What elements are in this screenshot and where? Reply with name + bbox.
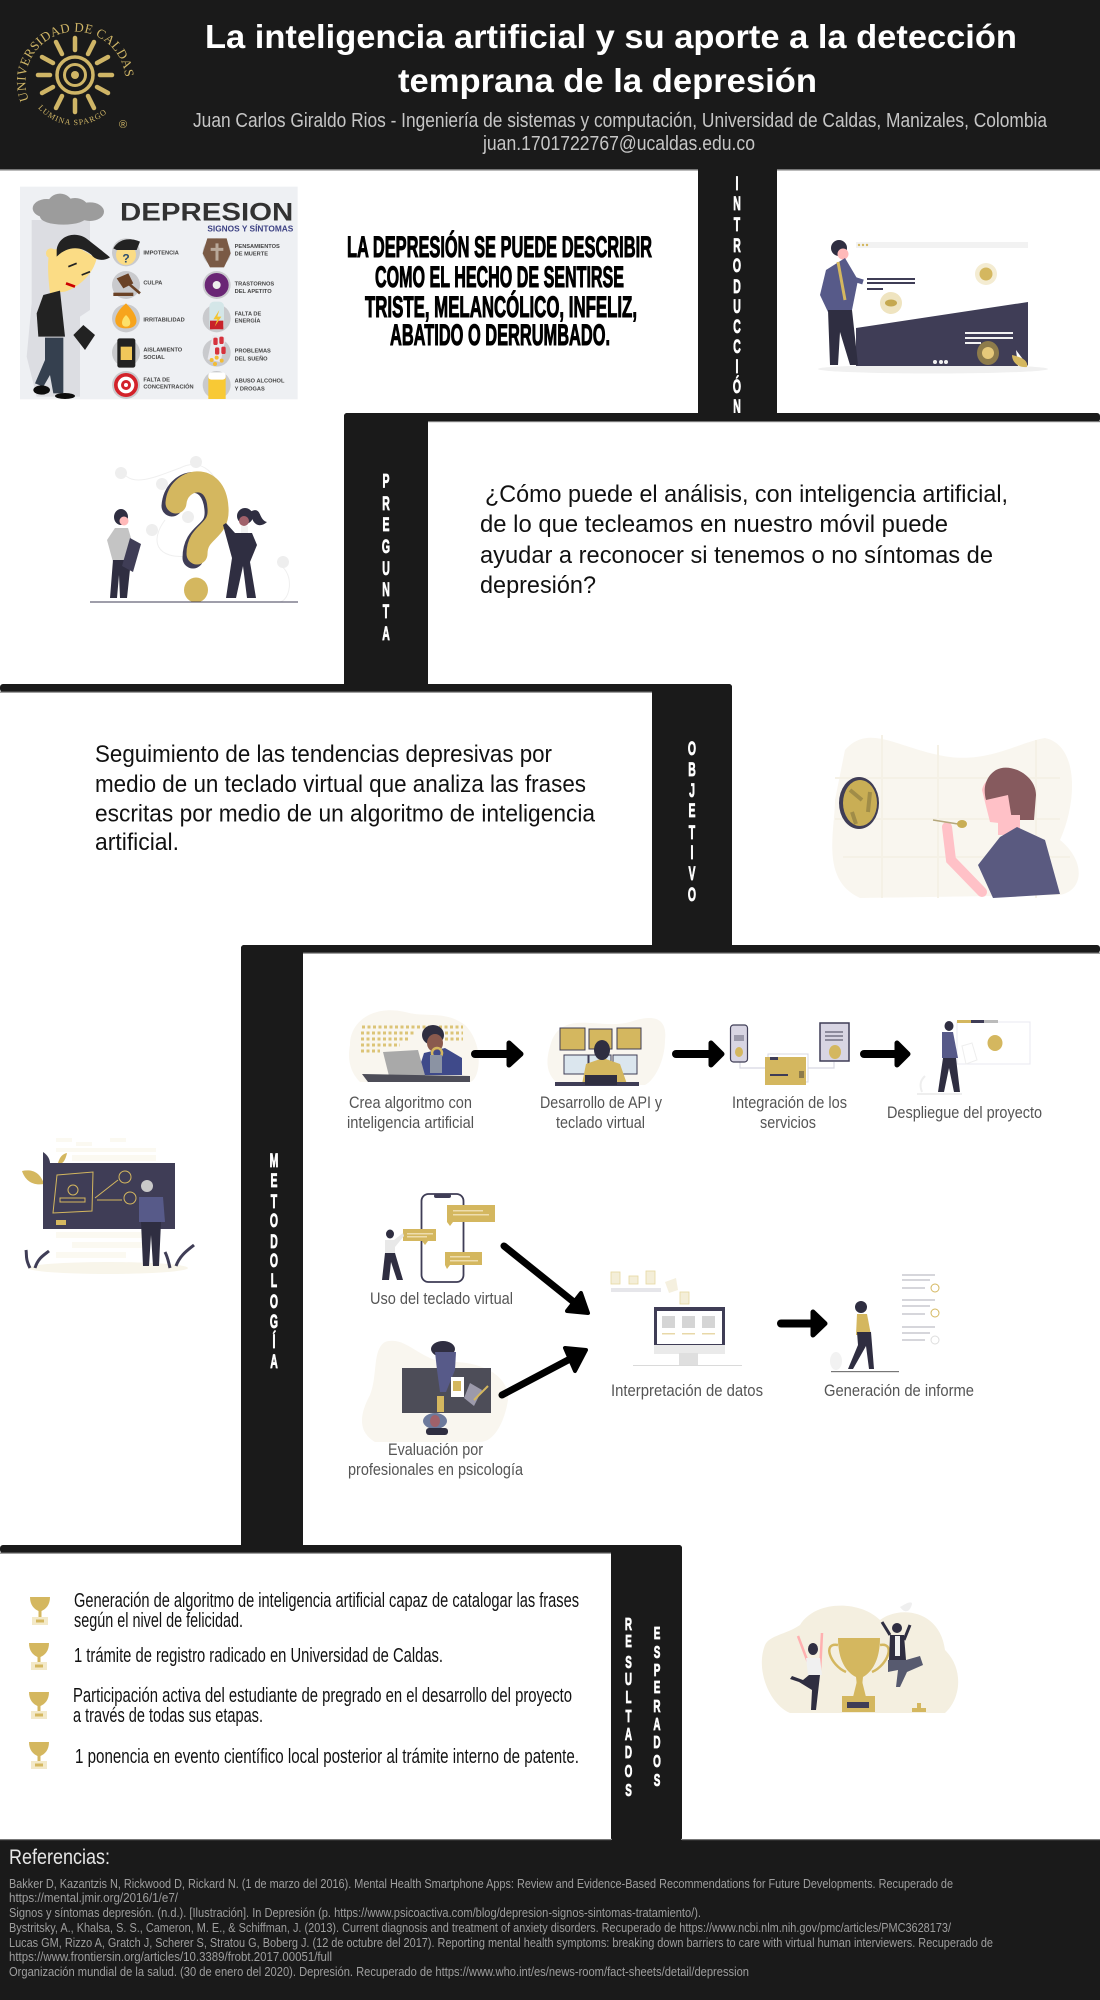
panel: referencias xyxy=(0,1839,1100,2000)
label: uso del teclado virtual: Uso del teclado virtual xyxy=(370,1290,513,1308)
heading: metodologia: Í xyxy=(273,1332,276,1353)
icon: trofeo 2 xyxy=(29,1643,49,1670)
labels: pasos de desarrollo: Desarrollo de API y xyxy=(540,1094,663,1112)
text block: pregunta de investigacion xyxy=(480,481,1008,599)
heading: resultados: U xyxy=(625,1670,632,1690)
heading: metodologia: L xyxy=(271,1271,277,1292)
logo: Universidad de Caldas xyxy=(16,22,134,131)
author and affiliation xyxy=(193,109,1048,155)
image: depresion signos y sintomas: PENSAMIENTOS xyxy=(235,244,280,250)
image: depresion signos y sintomas: DEL APETITO xyxy=(235,289,272,295)
heading: pregunta: P xyxy=(383,471,389,492)
heading: resultados: O xyxy=(625,1762,632,1782)
heading: resultados: D xyxy=(625,1743,632,1763)
illustration: evaluacion por profesionales xyxy=(362,1341,508,1442)
author and affiliation: juan.1701722767@ucaldas.edu.co xyxy=(482,132,755,155)
image: depresion signos y sintomas: FALTA DE xyxy=(143,377,170,383)
heading: resultados: S xyxy=(625,1781,632,1801)
labels: pasos de desarrollo: Crea algoritmo con xyxy=(349,1094,472,1112)
illustration: profesor en pizarra xyxy=(22,1138,194,1274)
icon: trofeo 4 xyxy=(29,1742,49,1769)
image: depresion signos y sintomas: IMPOTENCIA xyxy=(143,250,179,256)
text block: resultados: Generación de algoritmo de inteligencia artificial capaz de catalogar las frases xyxy=(74,1590,579,1612)
heading: introduccion: O xyxy=(733,256,741,277)
heading: introduccion: R xyxy=(733,236,741,257)
text block: resultados: Participación activa del estudiante de pregrado en el desarrollo del proyecto xyxy=(73,1685,572,1707)
list: referencias: Organización mundial de la salud. (30 de enero del 2020). Depresión. Recuperado de https://www.who.int/es/news-room/fact-sheets/detail/depression xyxy=(9,1964,749,1979)
text block: pregunta de investigacion: ¿Cómo puede el análisis, con inteligencia artificial, xyxy=(485,481,1008,508)
panel: introduccion column xyxy=(698,165,777,418)
heading: esperados: E xyxy=(654,1624,661,1644)
arrow: interpretacion a informe xyxy=(781,1312,825,1335)
text block: resultados xyxy=(73,1590,579,1768)
heading: pregunta: R xyxy=(382,494,390,515)
list: referencias: https://mental.jmir.org/2016/1/e7/ xyxy=(9,1890,178,1905)
heading: introduccion: C xyxy=(733,337,741,358)
band: resultados esperados xyxy=(0,1545,682,1841)
heading: metodologia: G xyxy=(270,1312,278,1333)
heading: esperados: R xyxy=(653,1697,661,1717)
heading: esperados: S xyxy=(654,1643,661,1663)
image: depresion signos y sintomas: SOCIAL xyxy=(143,355,165,361)
image: depresion signos y sintomas: ? xyxy=(122,252,130,266)
list: referencias xyxy=(9,1876,993,1979)
text block: resultados: según el nivel de felicidad. xyxy=(74,1610,243,1632)
list: referencias: Signos y síntomas depresión. (n.d.). [Ilustración]. In Depresión (p. https://www.psicoactiva.com/blog/depresion-signos-sintomas-tratamiento/). xyxy=(9,1905,701,1920)
heading: resultados: S xyxy=(625,1653,632,1673)
image: depresion signos y sintomas: IRRITABILIDAD xyxy=(143,318,185,324)
list: referencias: https://www.frontiersin.org/articles/10.3389/frobt.2017.00051/full xyxy=(9,1949,332,1964)
image: depresion signos y sintomas: CULPA xyxy=(143,280,162,286)
heading: metodologia: T xyxy=(271,1192,278,1213)
labels: pasos de desarrollo: servicios xyxy=(760,1114,816,1132)
title: La inteligencia artificial y su aporte a la detección xyxy=(205,18,1017,55)
illustration: crea algoritmo xyxy=(349,1010,479,1082)
text block: pregunta de investigacion: depresión? xyxy=(480,572,596,599)
heading: introduccion: Ó xyxy=(733,376,741,398)
heading: introduccion: D xyxy=(733,277,741,298)
logo: Universidad de Caldas: UNIVERSIDAD DE CALDAS xyxy=(16,22,134,102)
text block: definicion de depresion xyxy=(347,230,652,352)
text block: pregunta de investigacion: de lo que tecleamos en nuestro móvil puede xyxy=(480,511,948,538)
heading: introduccion: I xyxy=(736,357,738,378)
heading: pregunta: T xyxy=(383,602,390,623)
image: depresion signos y sintomas: DE MUERTE xyxy=(235,252,268,258)
heading: metodologia: E xyxy=(271,1171,277,1192)
heading: metodologia: O xyxy=(270,1292,278,1313)
heading: objetivo: V xyxy=(689,864,696,885)
heading: resultados: A xyxy=(625,1725,632,1745)
illustration: uso del teclado virtual xyxy=(382,1194,495,1282)
heading: esperados: O xyxy=(653,1752,661,1772)
list: referencias: Bystritsky, A., Khalsa, S. S., Cameron, M. E., & Schiffman, J. (2013). Current diagnosis and treatment of anxiety disorders. Recuperado de https://www.ncbi.nlm.nih.gov/pmc/articles/PMC3628173/ xyxy=(9,1920,951,1935)
heading: metodologia: M xyxy=(270,1151,278,1172)
heading: objetivo: I xyxy=(691,843,693,864)
text block: pregunta de investigacion: ayudar a reconocer si tenemos o no síntomas de xyxy=(480,542,993,569)
heading: metodologia: O xyxy=(270,1211,278,1232)
image: depresion signos y sintomas: Y DROGAS xyxy=(235,386,265,392)
heading: objetivo: O xyxy=(688,885,696,906)
labels: pasos de desarrollo: Despliegue del proyecto xyxy=(887,1104,1042,1122)
heading: objetivo: B xyxy=(688,760,696,781)
text block: resultados: a través de todas sus etapas. xyxy=(73,1705,263,1727)
text block: objetivo: escritas por medio de un algoritmo de inteligencia xyxy=(95,800,596,828)
label: evaluacion por profesionales: profesionales en psicología xyxy=(348,1461,524,1479)
arrow: teclado a interpretacion xyxy=(504,1246,588,1313)
text block: resultados: 1 ponencia en evento científico local posterior al trámite interno de patente. xyxy=(75,1746,579,1768)
image: depresion signos y sintomas: ABUSO ALCOHOL xyxy=(235,379,285,385)
band: metodologia xyxy=(241,945,1100,1549)
title: temprana de la depresión xyxy=(398,62,817,99)
heading: pregunta: A xyxy=(382,624,390,645)
band: pregunta xyxy=(344,413,1100,692)
band: objetivo xyxy=(0,684,732,949)
heading: metodologia: D xyxy=(270,1232,278,1253)
arrow: integracion a despliegue xyxy=(864,1043,908,1065)
image: depresion signos y sintomas: CONCENTRACIÓN xyxy=(143,383,194,391)
arrow: API a integracion xyxy=(676,1043,722,1065)
illustration: integracion de servicios xyxy=(730,1023,849,1085)
heading: metodologia: O xyxy=(270,1251,278,1272)
image: depresion signos y sintomas xyxy=(20,187,298,399)
illustration: personas con signo de interrogacion xyxy=(90,456,298,602)
image: depresion signos y sintomas: SIGNOS Y SÍNTOMAS xyxy=(207,225,294,234)
illustration: generacion de informe xyxy=(830,1275,939,1372)
label: generacion de informe: Generación de informe xyxy=(824,1382,974,1400)
heading: esperados: D xyxy=(653,1733,661,1753)
heading: metodologia: A xyxy=(270,1352,278,1373)
text block: objetivo: artificial. xyxy=(95,829,179,856)
text block: objetivo: Seguimiento de las tendencias depresivas por xyxy=(95,741,552,768)
heading: introduccion: T xyxy=(734,215,741,236)
text block: resultados: 1 trámite de registro radicado en Universidad de Caldas. xyxy=(74,1645,443,1667)
heading: objetivo: T xyxy=(689,823,696,844)
image: depresion signos y sintomas: PROBLEMAS xyxy=(235,349,271,355)
image: depresion signos y sintomas: FALTA DE xyxy=(235,311,261,317)
logo: Universidad de Caldas: LUMINA SPARGO xyxy=(38,104,106,126)
text block: definicion de depresion: LA DEPRESIÓN SE PUEDE DESCRIBIR xyxy=(347,230,652,264)
heading: introduccion: U xyxy=(733,297,741,318)
image: depresion signos y sintomas: AISLAMIENTO xyxy=(143,347,183,353)
heading: esperados: S xyxy=(654,1771,661,1791)
text block: objetivo: medio de un teclado virtual que analiza las frases xyxy=(95,771,586,798)
label: evaluacion por profesionales xyxy=(348,1441,524,1479)
labels: pasos de desarrollo: teclado virtual xyxy=(556,1114,645,1132)
label: interpretacion de datos: Interpretación de datos xyxy=(611,1382,763,1400)
heading: esperados: P xyxy=(654,1661,661,1681)
labels: pasos de desarrollo: Integración de los xyxy=(732,1094,847,1112)
header band xyxy=(0,0,1100,170)
illustration: despliegue del proyecto xyxy=(917,1020,1030,1094)
icon: trofeo 1 xyxy=(30,1597,50,1625)
image: depresion signos y sintomas: ENERGÍA xyxy=(235,317,260,325)
heading: esperados: E xyxy=(654,1678,661,1698)
heading: objetivo: E xyxy=(689,801,695,822)
illustration: desarrollo de API xyxy=(547,1018,665,1086)
illustration: hombre presentando xyxy=(818,240,1048,374)
heading: esperados: A xyxy=(653,1715,661,1735)
heading: introduccion: N xyxy=(733,397,741,418)
heading: introduccion: I xyxy=(736,174,738,195)
illustration: hombre lanzando dardo xyxy=(832,735,1079,898)
heading: pregunta: E xyxy=(383,515,389,536)
labels: pasos de desarrollo xyxy=(347,1094,1042,1132)
heading: introduccion: N xyxy=(733,194,741,215)
text block: definicion de depresion: ABATIDO O DERRUMBADO. xyxy=(390,319,610,352)
image: depresion signos y sintomas: DEPRESION xyxy=(120,199,293,227)
title xyxy=(205,18,1017,99)
heading: resultados: R xyxy=(625,1615,632,1635)
image: depresion signos y sintomas: TRASTORNOS xyxy=(235,281,274,287)
icon: trofeo 3 xyxy=(29,1692,49,1719)
heading: introduccion: C xyxy=(733,317,741,338)
heading: objetivo: O xyxy=(688,739,696,760)
illustration: celebracion con trofeo xyxy=(762,1602,958,1713)
illustration: interpretacion de datos xyxy=(611,1271,742,1366)
heading: referencias: Referencias: xyxy=(9,1846,110,1869)
image: depresion signos y sintomas: DEL SUEÑO xyxy=(235,355,268,362)
text block: definicion de depresion: COMO EL HECHO DE SENTIRSE xyxy=(375,261,624,294)
logo: Universidad de Caldas: ® xyxy=(119,119,127,131)
heading: pregunta: G xyxy=(382,537,390,558)
heading: pregunta: N xyxy=(382,580,390,601)
arrow: evaluacion a interpretacion xyxy=(502,1348,586,1395)
text block: definicion de depresion: TRISTE, MELANCÓLICO, INFELIZ, xyxy=(365,290,637,324)
heading: resultados: T xyxy=(625,1707,632,1727)
heading: objetivo: J xyxy=(689,781,695,802)
label: evaluacion por profesionales: Evaluación por xyxy=(388,1441,483,1459)
heading: resultados: E xyxy=(625,1632,632,1652)
arrow: algoritmo a API xyxy=(475,1043,521,1065)
text block: objetivo xyxy=(95,741,596,856)
labels: pasos de desarrollo: inteligencia artificial xyxy=(347,1114,474,1132)
heading: pregunta: U xyxy=(382,559,390,580)
heading: resultados: L xyxy=(625,1688,632,1708)
